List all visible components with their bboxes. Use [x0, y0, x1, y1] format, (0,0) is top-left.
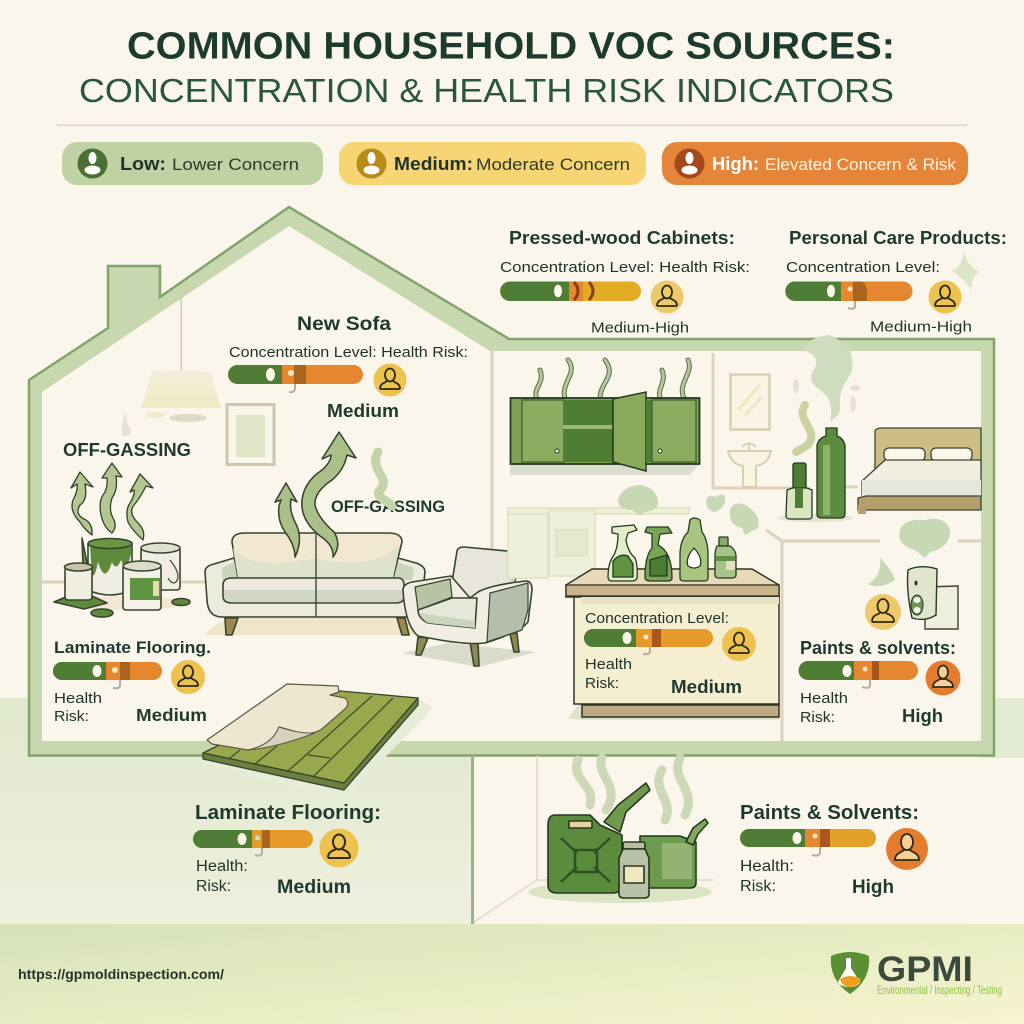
ceiling lamp: [141, 297, 221, 422]
legend: medium: Moderate Concern: [476, 155, 630, 174]
logo: GPMI: [877, 950, 973, 989]
interior walls: [42, 350, 981, 741]
concentration bar: [799, 661, 918, 688]
legend: low: [62, 142, 323, 185]
paints and solvents label block large: Paints & Solvents:: [740, 802, 919, 824]
laminate flooring label block lower: Laminate Flooring:: [195, 802, 381, 824]
wall picture: [227, 404, 274, 464]
concentration bar: [500, 282, 641, 301]
new sofa label block: [228, 313, 468, 421]
cleaner bottles: [608, 518, 736, 581]
legend: high: Elevated Concern & Risk: [765, 155, 956, 174]
personal care products label block: Concentration Level:: [786, 259, 940, 276]
title: COMMON HOUSEHOLD VOC SOURCES:: [127, 26, 895, 68]
concentration bar: [228, 365, 363, 392]
arrows above sofa: [275, 432, 356, 557]
health risk icon: [928, 280, 962, 314]
house outline: [29, 207, 994, 756]
bed: [858, 428, 981, 514]
legend: high: High:: [712, 154, 759, 174]
concentration bar: [53, 662, 162, 688]
arrows from paint cans: [71, 463, 153, 540]
pressed-wood cabinets label block: Medium-High: [591, 320, 689, 336]
pressed-wood cabinets label block: Pressed-wood Cabinets:: [509, 228, 735, 248]
plug-in air freshener: [908, 567, 958, 629]
counter label block: Risk:: [585, 675, 619, 692]
bathroom mirror: [730, 374, 770, 430]
counter: [566, 569, 779, 720]
health risk icon: [374, 364, 406, 396]
concentration bar: [740, 829, 876, 856]
personal care smoke: [793, 335, 860, 452]
small wisp near label: [122, 412, 131, 436]
health risk icon: [171, 660, 205, 694]
sparkle: [951, 250, 979, 291]
new sofa label block: New Sofa: [297, 313, 391, 335]
sofa: [205, 533, 425, 635]
basement: [471, 755, 714, 924]
laminate flooring label block inside: [53, 638, 211, 725]
legend: high: [662, 142, 968, 185]
laminate flooring sample: [194, 684, 433, 800]
solvent cans: [528, 783, 712, 903]
paints and solvents label block large: [740, 802, 928, 898]
laminate flooring label block inside: Medium: [136, 705, 207, 725]
pressed-wood cabinets label block: Concentration Level: Health Risk:: [500, 259, 750, 276]
ground band right: [980, 698, 1024, 758]
armchair: [402, 547, 537, 667]
pressed-wood cabinets label block: [500, 228, 750, 336]
health risk icon: [320, 828, 358, 868]
laminate flooring label block lower: Risk:: [196, 878, 231, 895]
title: CONCENTRATION & HEALTH RISK INDICATORS: [79, 73, 894, 110]
legend: medium: Medium:: [394, 154, 473, 174]
cabinets illustration: [510, 360, 700, 475]
legend: low: Lower Concern: [172, 155, 299, 174]
footer band: [0, 924, 1024, 1024]
personal care products label block: Personal Care Products:: [789, 228, 1007, 248]
nail polish and aerosol: [777, 428, 853, 522]
personal care products label block: [785, 228, 1007, 336]
title: [79, 26, 895, 110]
health risk icon: [886, 828, 928, 870]
laminate flooring label block lower: Health:: [196, 858, 248, 875]
solvent fumes: [576, 758, 689, 820]
paints and solvents label block small: Paints & solvents:: [800, 638, 956, 658]
laminate flooring label block inside: Laminate Flooring.: [54, 638, 211, 657]
paints and solvents label block small: [799, 638, 960, 726]
paints and solvents label block large: Health:: [740, 858, 794, 875]
paints and solvents label block small: Risk:: [800, 709, 835, 726]
concentration bar: [193, 830, 313, 856]
plug-in health icon: [865, 594, 901, 630]
off-gassing label left: OFF-GASSING: [63, 440, 191, 460]
vapour wisps: [536, 360, 689, 410]
paints and solvents label block small: Health: [800, 690, 848, 707]
paints and solvents label block large: Risk:: [740, 878, 776, 895]
paint cans: [54, 538, 190, 617]
laminate flooring label block inside: Risk:: [54, 708, 89, 725]
new sofa label block: Medium: [327, 401, 399, 421]
laminate flooring label block inside: Health: [54, 690, 102, 707]
laminate flooring label block lower: Medium: [277, 877, 351, 898]
counter label block: Health: [585, 656, 632, 673]
health risk icon: [926, 660, 960, 696]
counter label block: Medium: [671, 677, 742, 697]
counter label block: Concentration Level:: [585, 610, 729, 627]
personal care products label block: Medium-High: [870, 318, 972, 336]
logo shield: [831, 952, 869, 994]
faint kitchen: [508, 508, 690, 578]
bathroom sink: [728, 444, 771, 487]
laminate flooring label block lower: [193, 802, 381, 898]
counter label block: [584, 610, 756, 697]
paints and solvents label block small: High: [902, 706, 943, 726]
legend: medium: [339, 142, 646, 185]
new sofa label block: Concentration Level: Health Risk:: [229, 344, 468, 361]
paints and solvents label block large: High: [852, 877, 894, 898]
logo: [831, 950, 1002, 997]
ground band left: [0, 698, 471, 924]
legend: low: Low:: [120, 154, 166, 174]
cleaner smoke: [618, 485, 950, 586]
concentration bar: [584, 629, 713, 654]
off-gassing label sofa: OFF-GASSING: [331, 498, 445, 516]
health risk icon: [722, 627, 756, 661]
sofa smoke wisp: [375, 452, 392, 506]
footer url: https://gpmoldinspection.com/: [18, 966, 224, 982]
concentration bar: [785, 282, 912, 309]
health risk icon: [650, 280, 684, 314]
